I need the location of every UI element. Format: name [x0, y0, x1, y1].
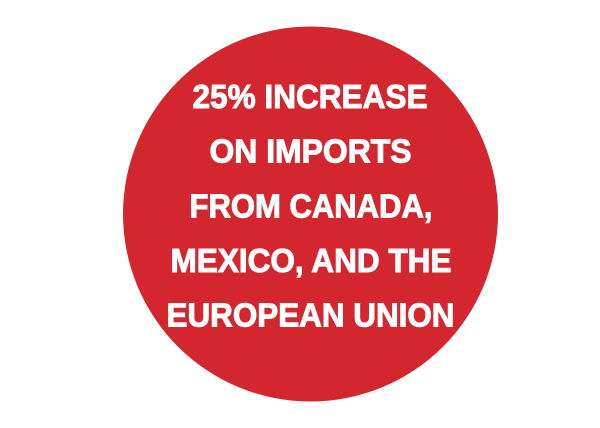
headline text: ON IMPORTS — [210, 132, 412, 170]
red circle — [123, 26, 498, 402]
headline text: EUROPEAN UNION — [166, 296, 454, 334]
headline text: 25% INCREASE — [192, 78, 428, 115]
headline text: FROM CANADA, — [190, 188, 432, 224]
headline text: MEXICO, AND THE — [170, 242, 452, 279]
headline text — [166, 78, 454, 334]
